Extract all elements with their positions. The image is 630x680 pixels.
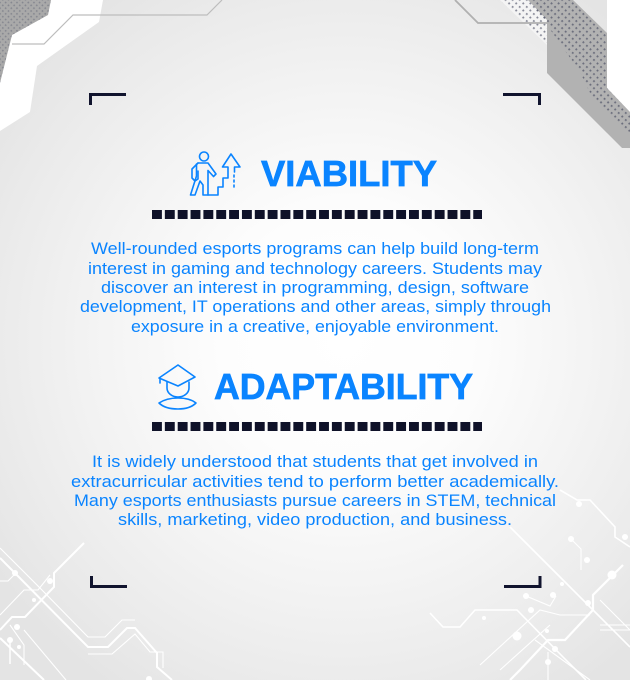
text block: adaptability: extracurricular activities tend to perform better academically. [71, 473, 559, 491]
heading: viability: VIABILITY [261, 153, 437, 194]
top-right corner shapes [455, 0, 630, 148]
text block: adaptability: It is widely understood that students that get involved in [92, 453, 538, 471]
text block: viability [80, 240, 551, 336]
corner bracket: bottom left [92, 576, 127, 586]
text block: viability: interest in gaming and technology careers. Students may [88, 260, 543, 278]
text block: viability: Well-rounded esports programs can help build long-term [91, 240, 539, 258]
icon: graduate with mortarboard [159, 365, 196, 409]
corner bracket: top left [90, 94, 126, 105]
corner bracket: top right [503, 94, 540, 105]
text block: viability: discover an interest in programming, design, software [101, 279, 529, 297]
circuit lines bottom-left [0, 543, 172, 680]
icon: person climbing stairs with arrow [190, 152, 240, 195]
text block: adaptability: skills, marketing, video production, and business. [118, 511, 512, 529]
heading: adaptability: ADAPTABILITY [214, 366, 473, 407]
divider: viability [152, 210, 482, 219]
top-left corner shapes [0, 0, 222, 131]
corner bracket: bottom right [504, 576, 540, 586]
text block: adaptability [71, 453, 559, 529]
text block: viability: development, IT operations and other areas, simply through [80, 298, 551, 316]
text block: viability: exposure in a creative, enjoyable environment. [131, 318, 499, 336]
text block: adaptability: Many esports enthusiasts pursue careers in STEM, technical [74, 492, 556, 510]
divider: adaptability [152, 422, 482, 431]
circuit lines bottom-right [430, 490, 630, 680]
